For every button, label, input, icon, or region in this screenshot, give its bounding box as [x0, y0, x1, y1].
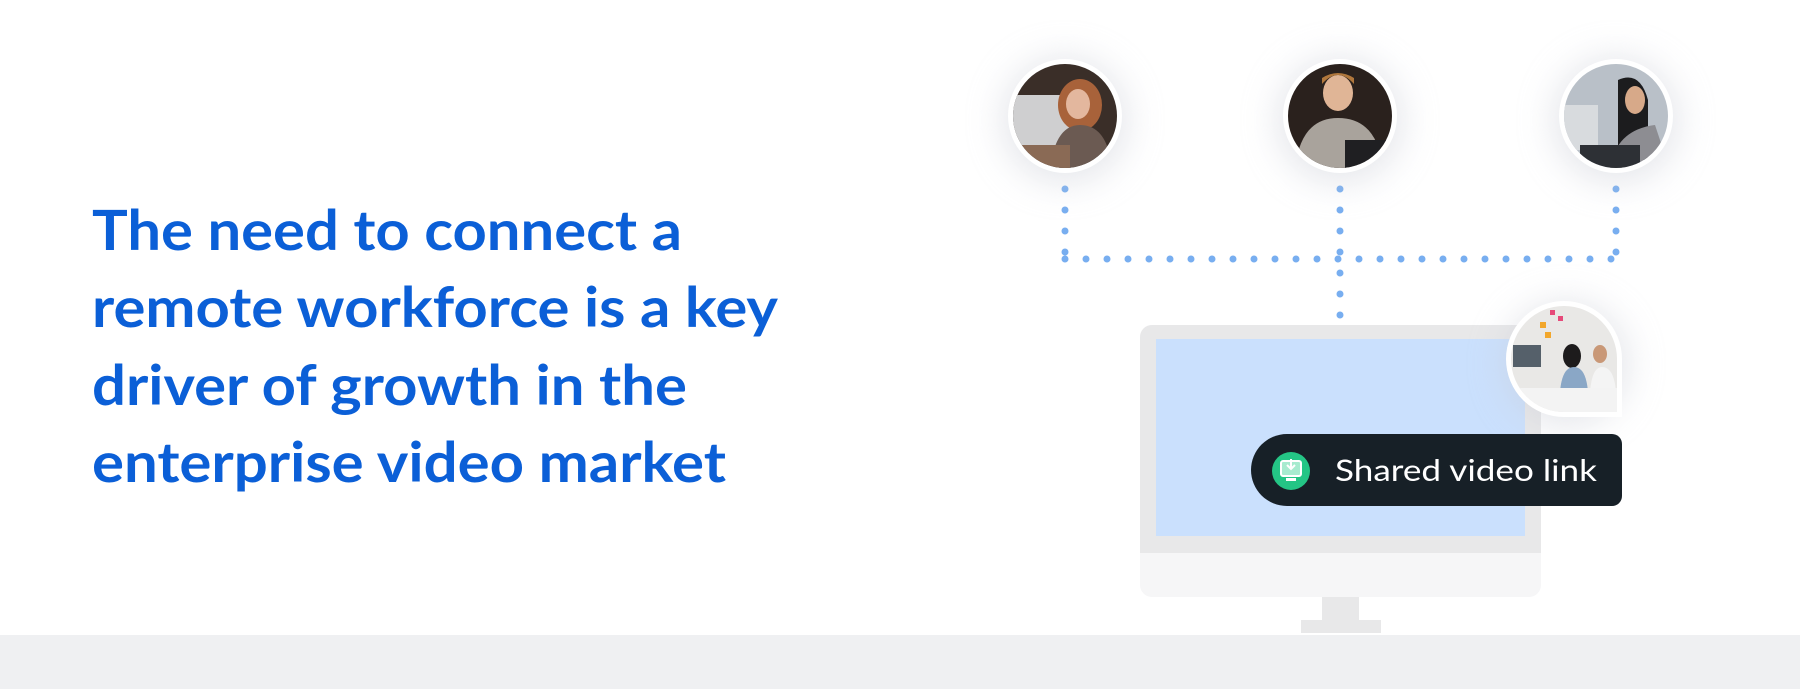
icon: green download monitor	[1272, 452, 1310, 490]
heading: enterprise video market	[92, 427, 726, 494]
heading: The need to connect a	[92, 195, 682, 262]
callout: shared video link	[1251, 434, 1622, 506]
heading: driver of growth in the	[92, 350, 687, 417]
dotted connectors	[1065, 189, 1616, 325]
avatar 2	[1278, 58, 1402, 182]
monitor	[1140, 325, 1541, 633]
heading: remote workforce is a key	[92, 272, 778, 339]
callout: shared video link: Shared video link	[1335, 452, 1598, 488]
heading	[92, 195, 778, 494]
floor	[0, 635, 1800, 689]
avatar 1	[1003, 58, 1127, 182]
avatar 4: team meeting	[1504, 300, 1628, 426]
avatar 3	[1554, 58, 1678, 182]
